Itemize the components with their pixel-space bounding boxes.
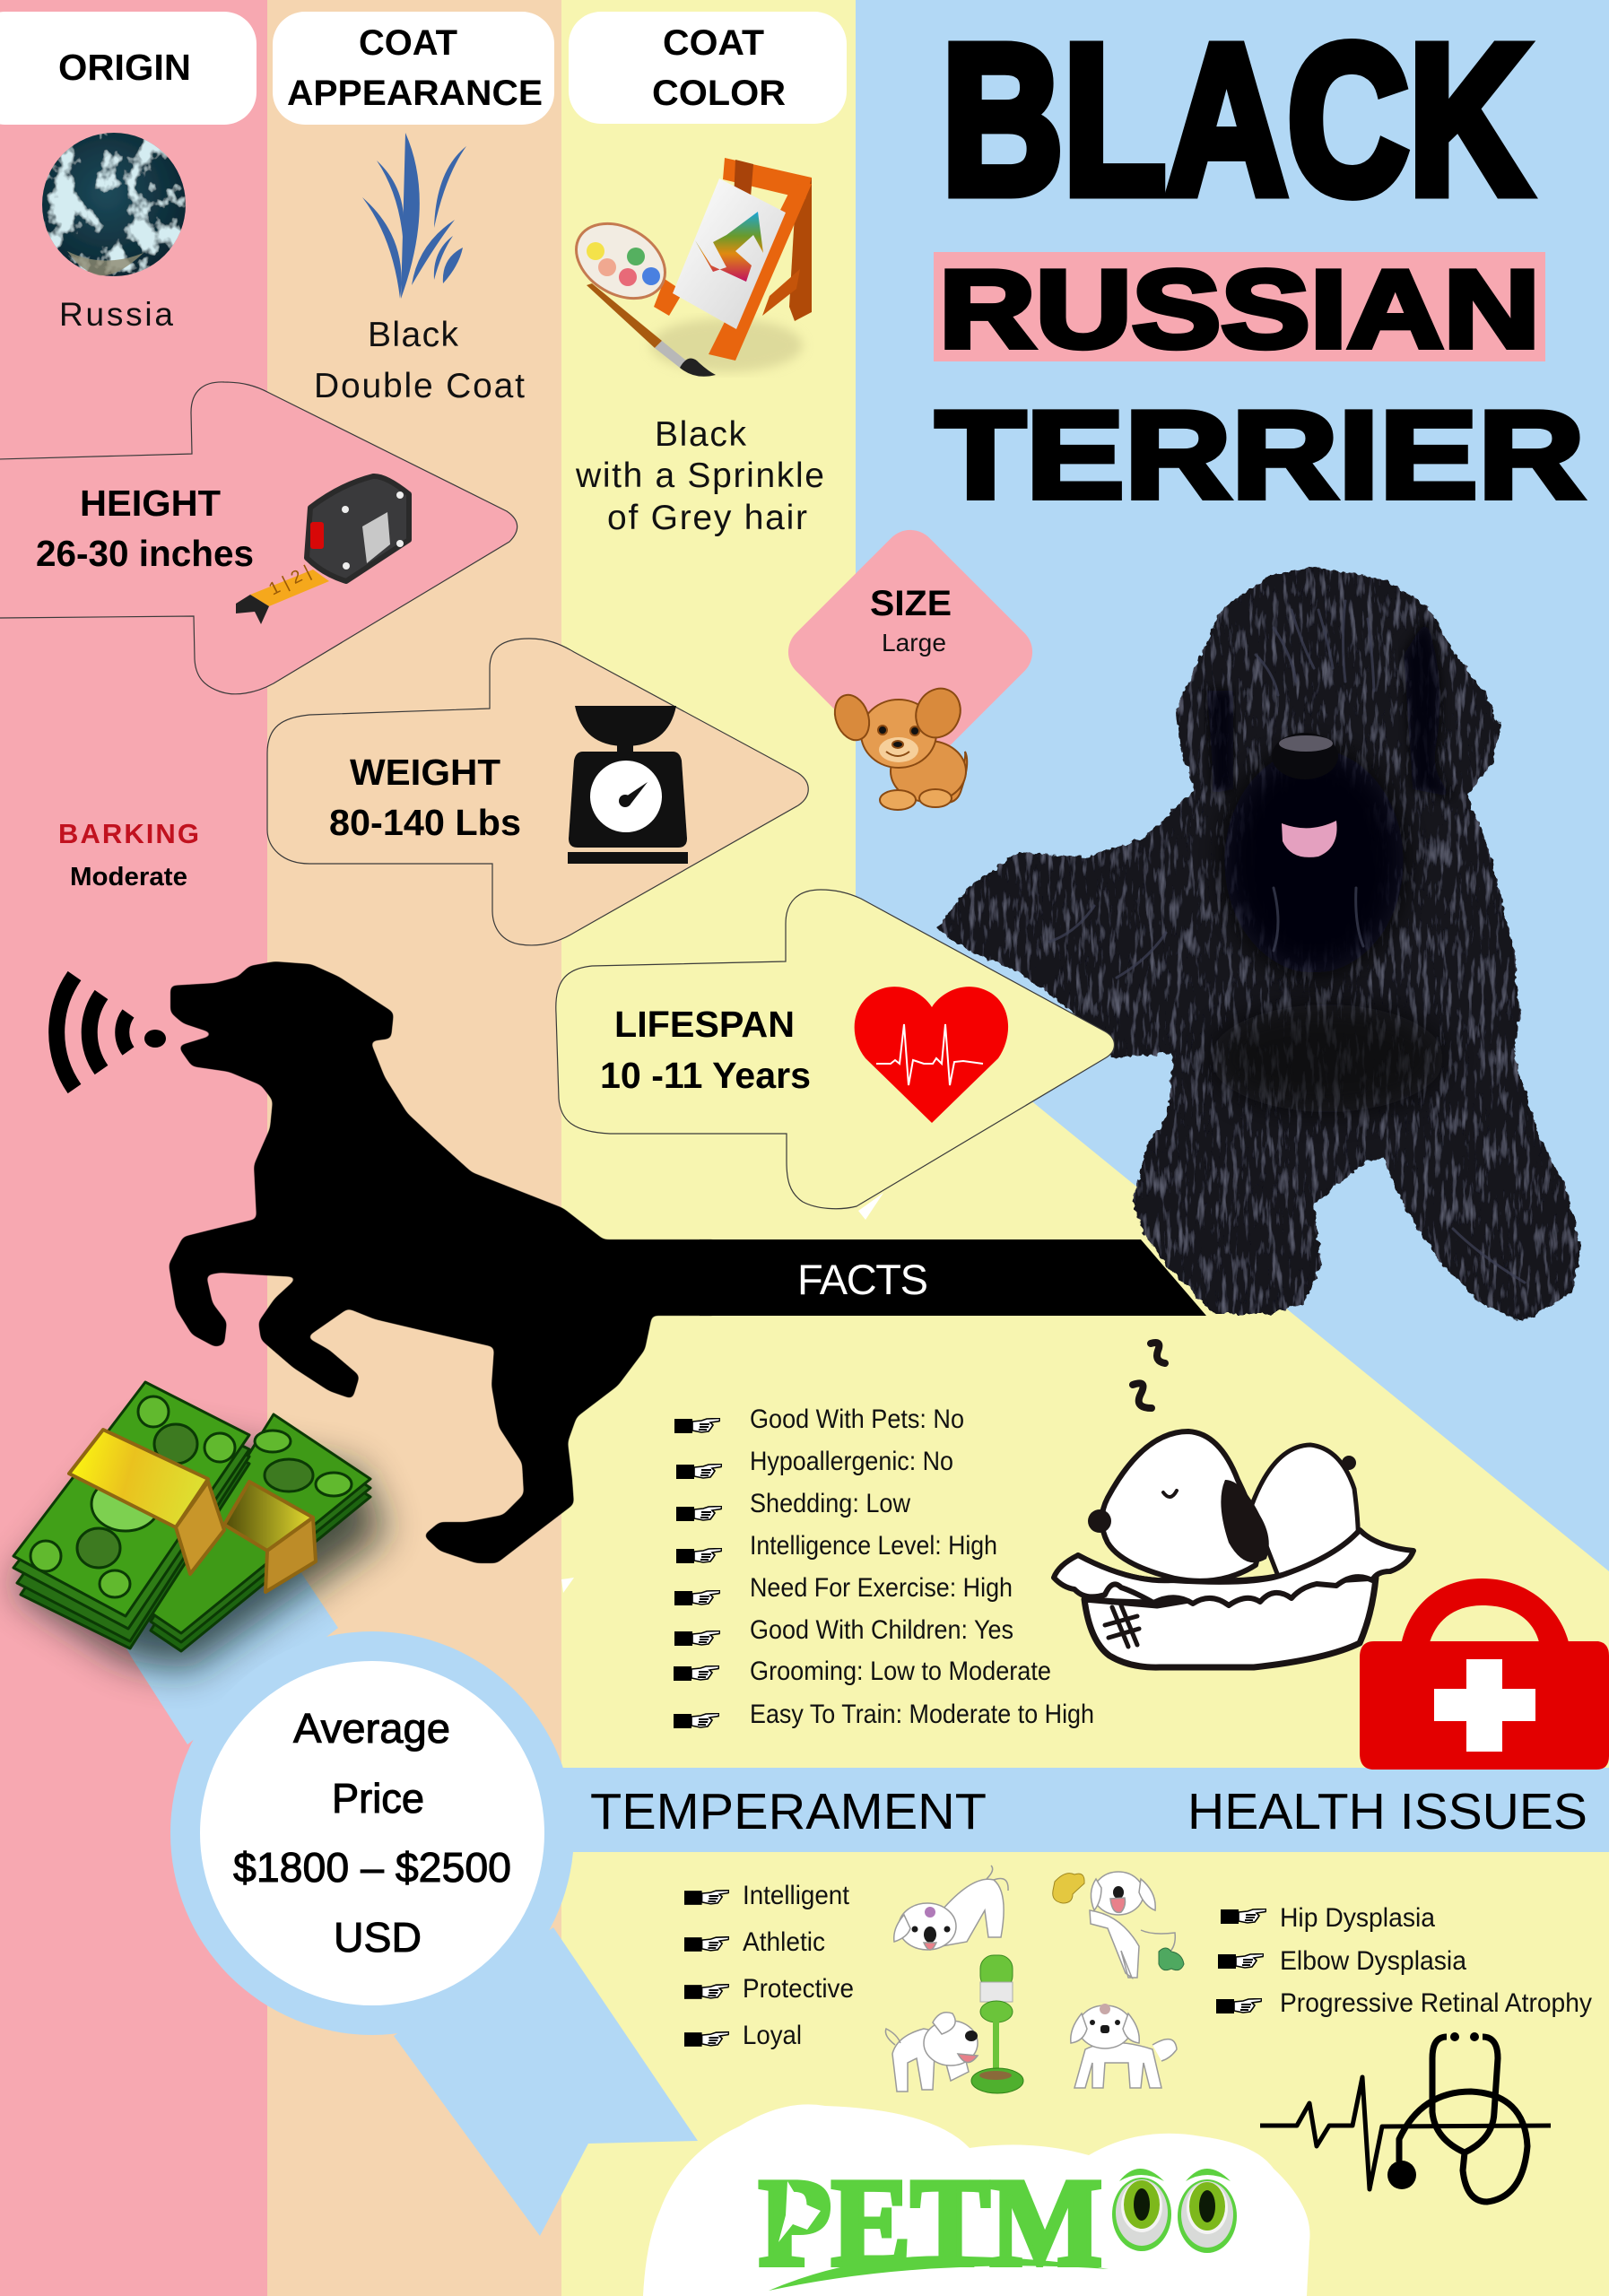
dog: ear shadow left [1206, 691, 1233, 794]
health issues list [1216, 1903, 1592, 2018]
text: coat color value: of Grey hair [607, 499, 807, 537]
dog: dark chest [1211, 1004, 1444, 1112]
arrow: weight: 80-140 Lbs [329, 802, 521, 843]
icon: easel, canvas, palette and brush [563, 158, 812, 377]
ribbon badge: average price: USD [334, 1914, 422, 1961]
icon: blue hair blades [362, 133, 466, 299]
fact: good with pets: Good With Pets: No [750, 1405, 964, 1434]
dog: ear shadow right [1404, 619, 1457, 798]
text: coat color value: with a Sprinkle [575, 457, 824, 495]
arrow: lifespan: LIFESPAN [614, 1004, 795, 1045]
title: terrier: TERRIER [935, 386, 1585, 525]
fact: hypoallergenic: Hypoallergenic: No [750, 1447, 953, 1476]
cartoon dog: bowing [894, 1866, 1008, 1950]
title: russian highlight: RUSSIAN [939, 248, 1540, 371]
header: coat color: COLOR [652, 74, 786, 113]
icon: red heart with pulse [855, 987, 1008, 1123]
money: gold bands [69, 1430, 316, 1592]
text: coat color value [575, 415, 824, 537]
icon: tape measure: 1 | 2 | [265, 561, 314, 599]
text: coat appearance value [314, 316, 525, 405]
money: back stack [151, 1414, 370, 1651]
icon: green toy bone [1159, 1948, 1184, 1970]
fact: grooming: Grooming: Low to Moderate [750, 1657, 1051, 1686]
icon: sleeping dog in bed [1054, 1343, 1413, 1667]
diamond: size: Large [882, 629, 946, 657]
fact: shedding [676, 1489, 910, 1521]
diamond: size [778, 519, 1043, 810]
header: coat appearance: APPEARANCE [287, 74, 543, 113]
fact: good with children [674, 1615, 1013, 1646]
background: blue diagonal panel [856, 0, 1609, 1571]
cartoon dog: eating from feeder [885, 1955, 1023, 2093]
fact: good with pets [674, 1405, 964, 1434]
fact: intelligence level: Intelligence Level: High [750, 1531, 997, 1561]
ribbon badge: average price: Price [332, 1775, 424, 1822]
background: pink column [0, 0, 267, 2296]
text: coat color value: Black [655, 415, 746, 454]
icon: weighing scale [568, 706, 688, 864]
header: coat color: COAT [663, 23, 764, 63]
issue: hip dysplasia: Hip Dysplasia [1280, 1903, 1435, 1933]
ribbon: lower tail [394, 1927, 698, 2236]
heading: health issues: HEALTH ISSUES [1187, 1783, 1587, 1840]
money: front stack [13, 1382, 249, 1648]
fact: need for exercise: Need For Exercise: High [750, 1573, 1013, 1603]
logo cloud [643, 2104, 1309, 2296]
fact: good with children: Good With Children: Yes [750, 1615, 1013, 1645]
trait: protective [684, 1974, 854, 2004]
arrow: height: 26-30 inches [36, 533, 254, 574]
header: coat color [569, 12, 847, 124]
trait: loyal: Loyal [743, 2021, 802, 2050]
trait: intelligent [684, 1881, 850, 1910]
trait: intelligent: Intelligent [743, 1881, 850, 1910]
ribbon badge: average price: Average [293, 1705, 450, 1752]
background: peach column [267, 0, 561, 2296]
arrow: lifespan [556, 890, 1114, 1209]
ribbon badge: average price [170, 1631, 574, 2035]
header: coat appearance [273, 12, 554, 125]
temperament list [684, 1881, 854, 2050]
cartoon dog: playing with toys [1090, 1872, 1175, 1978]
arrow: height [0, 382, 517, 694]
icon: earth globe [42, 133, 186, 276]
header: origin: ORIGIN [58, 47, 191, 88]
header: origin [0, 12, 257, 125]
dog: nose [1272, 733, 1338, 779]
logo: PETMOO: PETM [759, 2153, 1102, 2292]
icon: tape measure [236, 476, 409, 624]
heading: temperament: TEMPERAMENT [590, 1783, 987, 1840]
dog: tongue [1282, 821, 1337, 857]
arrow: height: HEIGHT [80, 483, 221, 524]
issue: elbow dysplasia: Elbow Dysplasia [1280, 1946, 1466, 1976]
band: temperament and health issues background [561, 1768, 1609, 1852]
fact: hypoallergenic [676, 1447, 953, 1479]
real dog photo: black russian terrier [937, 567, 1581, 1322]
black dog silhouette [169, 961, 718, 1563]
icon: orange puppy [829, 681, 969, 810]
text: barking: Moderate [70, 863, 187, 891]
dog: dark beard [1224, 749, 1404, 973]
trait: athletic [684, 1927, 825, 1957]
text: origin value: Russia [59, 296, 173, 333]
arrow: weight [267, 639, 808, 945]
text: barking: BARKING [58, 818, 199, 849]
fact: need for exercise [674, 1573, 1013, 1605]
trait: athletic: Athletic [743, 1927, 825, 1957]
trait: protective: Protective [743, 1974, 854, 2004]
logo: swoosh [769, 2256, 1109, 2291]
facts bar [700, 1239, 1206, 1316]
cartoon dog: sitting [1071, 2004, 1177, 2088]
icon: sound waves [57, 976, 166, 1089]
facts bar: FACTS [797, 1256, 928, 1303]
detail: white slivers [561, 1193, 883, 1593]
dog paw overlay on facts bar [1133, 1145, 1321, 1314]
diamond: size: SIZE [870, 584, 952, 623]
text: coat appearance value: Double Coat [314, 367, 525, 405]
text: coat appearance value: Black [368, 316, 459, 354]
issue: hip dysplasia [1221, 1903, 1435, 1933]
icon: red medical bag [1360, 1578, 1609, 1770]
fact: shedding: Shedding: Low [750, 1489, 910, 1518]
ribbon: upper strap [54, 1525, 338, 1744]
money stacks [13, 1382, 386, 1670]
logo: dog head cut-out [778, 2181, 821, 2242]
ribbon badge: average price: $1800 – $2500 [233, 1844, 511, 1891]
header: coat appearance: COAT [359, 23, 457, 63]
icon: stethoscope and heartbeat line [1260, 2032, 1551, 2202]
text: barking [58, 818, 199, 891]
issue: progressive retinal atrophy: Progressive Retinal Atrophy [1280, 1988, 1592, 2018]
logo: eyes [1112, 2169, 1237, 2253]
dog: fur highlights [1049, 601, 1525, 1283]
facts list [674, 1405, 1094, 1729]
background: yellow column [561, 0, 1609, 2296]
arrow: lifespan: 10 -11 Years [600, 1055, 811, 1096]
arrow: weight: WEIGHT [350, 752, 500, 793]
icon: yellow toy bone [1053, 1874, 1084, 1903]
trait: loyal [684, 2021, 802, 2050]
fact: easy to train: Easy To Train: Moderate to High [750, 1700, 1094, 1729]
fact: intelligence level [676, 1531, 997, 1563]
